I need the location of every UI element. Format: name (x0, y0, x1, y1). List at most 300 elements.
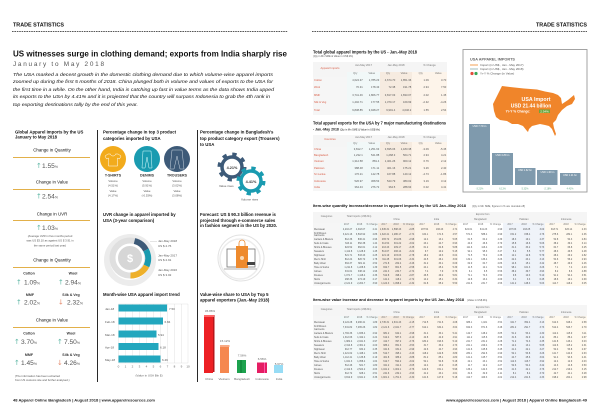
table: item-wise value: 7,331.82 (343, 326, 352, 329)
table: top 7 destinations: Vietnam (314, 160, 324, 163)
bar chart: 6.49 (162, 358, 168, 362)
category labels and values: (3.02%) (172, 184, 182, 188)
table: top 7 destinations: 4.41 (441, 186, 446, 189)
table: item-wise quantity: Bangladesh (474, 218, 487, 221)
table: top 7 destinations: 176.21 (354, 173, 363, 176)
map of USA: Yr-Y % Change: (506, 110, 530, 114)
footer right: www.apparelresources.com | August 2018 | Apparel Online Bangladesh 49 (445, 398, 587, 402)
table: total global apparel imports: 178.43 (371, 86, 379, 89)
change in quantity by fibre: ↓ (58, 298, 64, 306)
change in quantity by fibre: Change in Quantity (33, 258, 72, 262)
category labels and values: Value (174, 189, 181, 193)
change in value by fibre: Cotton (23, 332, 35, 336)
table: total global apparel imports: Silk & Veg (314, 101, 326, 104)
table: top 7 destinations: -1.86 (440, 173, 446, 176)
bar chart: 0 (118, 364, 120, 368)
table: item-wise value: 871.6 (481, 326, 487, 329)
table: top 7 destinations: 881.4 (372, 160, 379, 163)
table: item-wise quantity: 588.4 (481, 233, 487, 236)
gear captions: Value rises (219, 184, 234, 188)
table: total global apparel imports: 1,370.17 (385, 101, 395, 104)
panel: Bangladesh trousers (200, 130, 280, 202)
panel: USA apparel imports map (463, 50, 587, 192)
table: item-wise quantity: 571.3 (466, 233, 472, 236)
table: item-wise value: % Change (490, 316, 501, 319)
change in UVR: (Average UVR in five months period (28, 234, 73, 238)
change in value (13, 180, 90, 200)
bars by partner: 5.32% (522, 188, 529, 190)
table: top 7 destinations: 1,401.26 (385, 160, 395, 163)
change in value by fibre: ↑ (57, 338, 63, 346)
table: top 7 destinations: 142.78 (371, 173, 379, 176)
table: total global apparel imports: 9,991.4 (386, 109, 395, 112)
table: item-wise quantity: 2017 (549, 223, 555, 226)
table: total global apparel imports: Value (401, 72, 407, 75)
title: US witnesses surge in clothing demand; exports from India sharply rise (13, 48, 287, 58)
table: item-wise value: % Change (366, 316, 378, 319)
heading: categories imported by USA (103, 136, 161, 141)
bar chart: 5 (153, 364, 155, 368)
3d bar chart: 5.67% (275, 362, 284, 366)
3d bar chart: 36.86% (205, 309, 215, 313)
table: total global apparel imports: 169.99 (403, 101, 411, 104)
bar chart: 7.50 (169, 307, 175, 311)
table: item-wise quantity: Garments (314, 234, 324, 237)
table: total global apparel imports: -2.32 (423, 101, 429, 104)
table: total global apparel imports: 70.31 (356, 86, 363, 89)
table: total global apparel imports: Jan-May 2018 (387, 64, 405, 67)
table: top 7 destinations: 1,251.63 (369, 148, 379, 151)
change in value by fibre: MMF (25, 353, 34, 357)
table: total global apparel imports: 3.70 (441, 79, 446, 82)
table: top 7 destinations: Bangladesh (314, 154, 328, 157)
heading: in fashion segment in the US by 2020. (200, 223, 277, 228)
panel title and legend (470, 58, 524, 76)
footer left: 48 Apparel Online Bangladesh | August 2018 | www.apparelresources.com (13, 398, 155, 402)
table: top 7 destinations: 526.97 (354, 180, 363, 183)
icon: trousers (164, 146, 190, 172)
change in value by fibre: 3.70% (21, 339, 37, 346)
map of USA: USA Import (522, 97, 551, 103)
change in quantity by fibre: ↑ (16, 298, 22, 306)
table: total global apparel imports: Cotton (314, 79, 322, 82)
bar chart: Apr-18 (105, 346, 114, 350)
heading: top product category export (Trousers) (200, 136, 280, 141)
category labels and values: Volume (172, 179, 182, 183)
donut legend: US $ 2.91 (158, 258, 172, 262)
3d bar chart: 6.56% (258, 357, 267, 361)
table: item-wise value: 3.64 (453, 326, 457, 329)
heading: Forecast: US $ 90.3 billion revenue is (200, 212, 277, 217)
donut legend: Jan-May 2016 (158, 268, 177, 272)
left page header: TRADE STATISTICS (13, 22, 65, 28)
change in quantity (13, 148, 90, 170)
change in quantity by fibre: Wool (69, 272, 77, 276)
table: item-wise value: % Change (445, 316, 457, 319)
table: top 7 destinations: 140.12 (403, 173, 411, 176)
table: item-wise value: 2018 (478, 316, 483, 319)
subtitle date: January to May 2018 (13, 61, 104, 68)
table: total global apparel imports: 3,817.03 (385, 94, 395, 97)
heading: value table: Item-wise value increase and decrease in apparel imports by the US Jan.-May 2018 (313, 297, 465, 302)
table: top 7 destinations: 380.02 (403, 180, 411, 183)
change in value by fibre: Change in Value (36, 318, 69, 322)
table: item-wise quantity: % Change (366, 223, 378, 226)
table: item-wise value: 512.4 (552, 326, 558, 329)
table: item-wise value: 2017 (463, 316, 468, 319)
icon: denims (134, 146, 160, 172)
table: total global apparel imports: 4,046.2 (402, 109, 411, 112)
bars by partner: USD 7.74 bn (473, 125, 487, 128)
table: item-wise quantity: 164.1 (422, 233, 428, 236)
donut legend: Jan-May 2018 (158, 239, 177, 243)
change in value by fibre: ↓ (57, 359, 63, 367)
table: total global apparel imports: Jan-May 2017 (355, 64, 372, 67)
change in value by fibre: ↑ (14, 338, 20, 346)
change in UVR: ↑ (36, 224, 42, 232)
table: total global apparel imports: Apparel Imports (320, 67, 339, 70)
table: total global apparel imports: 3,948.27 (369, 109, 379, 112)
table: top 7 destinations (313, 135, 447, 191)
table: item-wise value: 842.3 (466, 326, 472, 329)
heading: quantity table: (Qty in Mn SME, figures in % are rounded-off) (472, 205, 525, 208)
change in quantity by fibre: Cotton (23, 272, 35, 276)
table: top 7 destinations: 2.12 (441, 160, 446, 163)
change in value by fibre: Wool (67, 332, 75, 336)
bar chart: 10 (186, 364, 190, 368)
table: top 7 destinations: 4.21 (441, 154, 446, 157)
table: item-wise quantity: Pakistan (519, 218, 529, 221)
heading (200, 130, 280, 147)
table: top 7 destinations: 541.88 (371, 154, 379, 157)
panel title and legend: Yr-Y % Change (in Value) (480, 72, 514, 76)
heading: to USA (200, 142, 214, 147)
heading (200, 292, 270, 302)
bar chart: Feb-18 (105, 320, 115, 324)
table: item-wise value: 3.48 (498, 326, 502, 329)
table: item-wise value: Categories (321, 308, 332, 311)
table: item-wise quantity: 2017 (381, 223, 387, 226)
map of USA (493, 86, 575, 136)
table: total global apparel imports: -4.26 (440, 101, 446, 104)
bar chart: 7 (167, 364, 169, 368)
table: item-wise quantity: 2017 (419, 223, 425, 226)
table: total global apparel imports: Value (435, 72, 442, 75)
change in value: ↑ (36, 192, 42, 200)
table: total global apparel imports: % Change (423, 64, 436, 67)
table: top 7 destinations: -3.09 (423, 148, 429, 151)
table: total global apparel imports: Total (314, 109, 320, 112)
bar chart: (Value in USA Bln $) (135, 374, 163, 378)
intro paragraph: The USA marked a decent growth in the domestic clothing demand due to which volume-wise apparel imports (13, 72, 274, 78)
table: item-wise quantity: % Change (575, 223, 586, 226)
table: top 7 destinations: -4.73 (423, 173, 429, 176)
3d bar chart: China (205, 377, 213, 381)
heading: projected through e-commerce sales (200, 218, 276, 223)
table: item-wise quantity: 1,286.17 (392, 233, 401, 236)
table: top 7 destinations: 543.79 (387, 180, 395, 183)
intro paragraph: top exporting destinations tally by the end of this year. (13, 102, 138, 108)
icon: laptop shopping bag (218, 235, 264, 281)
change in quantity by fibre: Silk & Veg (62, 293, 80, 297)
intro paragraph: the first time in a while. On the other hand, India is catching up fast in value terms as the data shows India upped (13, 87, 274, 93)
table: item-wise value: 612.1 (422, 326, 428, 329)
table: total global apparel imports: 3,741.46 (352, 94, 363, 97)
table: item-wise value: Total Imports (US$ Mn) (347, 308, 371, 311)
table: total global apparel imports: 72.38 (388, 86, 395, 89)
table: top 7 destinations: Pakistan (314, 167, 324, 170)
heading: apparel exporters (Jan.-May 2018) (200, 298, 270, 302)
table: total global apparel imports: Qty (419, 72, 423, 75)
panel: top 3 product categories (100, 130, 190, 198)
category labels and values: DENIMS (140, 174, 155, 178)
icon: volume gear: 4.41% (246, 180, 257, 184)
table: top 7 destinations: Qty (386, 142, 390, 145)
table: top 7 destinations: 3.12 (441, 180, 446, 183)
table: item-wise value: 2018 (393, 316, 399, 319)
heading: UVR change in apparel imported by (103, 212, 176, 217)
change in value: Change in Value (36, 180, 69, 184)
change in value by fibre: 7.50% (64, 339, 80, 346)
table: top 7 destinations: 364.5 (388, 186, 395, 189)
table: top 7 destinations: 368.53 (371, 180, 379, 183)
table: item-wise value: -3.77 (409, 326, 414, 329)
bar chart: 6.18 (160, 346, 166, 350)
table: item-wise quantity: Categories (321, 215, 332, 218)
icon: t-shirts (100, 146, 126, 172)
gear captions: Volume rises (241, 198, 259, 202)
table: top 7 destinations: 2.40 (441, 167, 446, 170)
heading: total global apparel imports (313, 50, 418, 58)
intro paragraph: zoomed up during the first 5 months of 2018. China plunged both in volume and values of exports to the USA for (12, 79, 273, 85)
table: item-wise quantity: Total Imports (US$ Mn) (347, 215, 371, 218)
table: total global apparel imports: 1,402.71 (352, 101, 363, 104)
table: total global apparel imports: 177.55 (371, 101, 379, 104)
table: item-wise quantity: 158.4 (524, 233, 530, 236)
3d bar chart: India (276, 377, 283, 381)
table: top 7 destinations: Jan-May 2017 (355, 136, 372, 139)
source note (15, 374, 70, 382)
category labels and values: (4.17%) (108, 194, 118, 198)
change in value by fibre: ↑ (14, 359, 20, 367)
bar chart: 3 (139, 364, 141, 368)
table: total global apparel imports: 1.55 (423, 109, 429, 112)
table: item-wise value: % Change (575, 316, 586, 319)
table: item-wise value: 2017 (549, 316, 555, 319)
table: item-wise quantity: 2.86 (373, 233, 377, 236)
change in quantity by fibre (13, 258, 90, 306)
donut legend: US $ 3.02 (158, 273, 172, 277)
heading: total global apparel imports: Total global apparel imports by the US - Jan.-May 2018 (313, 50, 418, 54)
table: top 7 destinations: 1,232.1 (354, 154, 363, 157)
table: top 7 destinations: 900.12 (403, 160, 411, 163)
right page header: TRADE STATISTICS (536, 22, 588, 28)
bar chart: 6.84 (164, 320, 171, 324)
table: item-wise quantity: 2017 (344, 223, 349, 226)
table: top 7 destinations: India (314, 186, 320, 189)
table: item-wise quantity: India (434, 218, 439, 221)
category labels and values: TROUSERS (167, 174, 188, 178)
table: top 7 destinations: Countries (324, 138, 336, 141)
table: item-wise value: 281.2 (510, 326, 516, 329)
table: top 7 destinations: 564.71 (403, 154, 411, 157)
table: total global apparel imports: Qty (386, 72, 390, 75)
table: item-wise value: 2017 (507, 316, 513, 319)
table: item-wise quantity: 2018 (521, 223, 527, 226)
bars by partner: USD 3.25 bn (496, 154, 510, 157)
change in quantity by fibre: ↑ (16, 278, 22, 286)
bar chart: 4 (146, 364, 148, 368)
change in UVR: Change in UVR (37, 212, 67, 216)
heading: top 7 manufacturing destinations: Total apparel exports for the USA by 7 major manufacturing destinations (313, 120, 447, 126)
table: item-wise value: 2017 (381, 316, 387, 319)
change in quantity: 1.55% (42, 163, 58, 170)
intro paragraph: its exports to the USA by 4.41% and it is projected that the country will surpass Indonesia to grab the 4th rank in (13, 94, 270, 100)
table: top 7 destinations: Value (401, 142, 407, 145)
change in quantity by fibre: 2.32% (67, 300, 83, 306)
table: item-wise value: 7,465.26 (356, 326, 365, 329)
table: top 7 destinations: Value (368, 142, 375, 145)
heading (103, 130, 177, 141)
donut legend: US $ 2.76 (158, 244, 172, 248)
change in value by fibre (13, 318, 90, 367)
table: item-wise quantity: % Change (532, 223, 544, 226)
heading: Global Apparel Imports by the US (15, 130, 83, 134)
bar chart: 8 (174, 364, 176, 368)
table: item-wise value: 2018 (434, 316, 439, 319)
change in value by fibre: 1.45% (21, 360, 37, 367)
table: item-wise value: 526.7 (566, 326, 572, 329)
table: total global apparel imports: Value (368, 72, 375, 75)
source note: from US customs site and further analysed.) (15, 378, 70, 382)
table: item-wise value: India (434, 311, 439, 314)
table: top 7 destinations: China (314, 148, 321, 151)
table: top 7 destinations: 2.94 (423, 154, 429, 157)
table: item-wise value: 634.4 (437, 326, 443, 329)
table: item-wise quantity: 4.57 (453, 233, 457, 236)
3d bar chart: 7.56% (238, 354, 247, 358)
icon: value gear: 4.21% (227, 166, 238, 170)
table: item-wise quantity: Exports from (476, 213, 489, 216)
table: top 7 destinations: Indonesia (314, 180, 326, 183)
table: top 7 destinations: 0.02 (423, 186, 429, 189)
table: item-wise value: 2017 (419, 316, 425, 319)
panel title and legend: Import (in US$ , Jan - May 2018) (480, 67, 524, 71)
category labels and values: (-0.53%) (142, 194, 152, 198)
heading: Percentage change in Bangladesh's (200, 130, 274, 134)
change in value by fibre: 4.26% (64, 360, 80, 367)
table: item-wise quantity: 2018 (393, 223, 399, 226)
bar chart: 5.94 (158, 333, 164, 337)
change in quantity by fibre: 1.09% (24, 280, 40, 286)
table: item-wise quantity: 2018 (434, 223, 439, 226)
table: item-wise value: Indonesia (561, 311, 571, 314)
table: total global apparel imports: 1.09 (423, 79, 429, 82)
source note: (The information has been extracted (15, 374, 60, 378)
bars by partner: 4.41% (567, 188, 574, 190)
table: item-wise quantity: % Change (490, 223, 501, 226)
table: top 7 destinations: 401.16 (387, 167, 395, 170)
heading: USA (3-year comparison) (103, 218, 155, 223)
table: item-wise value (313, 305, 587, 380)
table: item-wise quantity: % Change (445, 223, 457, 226)
table: item-wise value: 1.82 (373, 326, 377, 329)
bars by partner: USD 1.21 bn (563, 174, 578, 177)
table: top 7 destinations: 276.72 (371, 186, 379, 189)
category labels and values (105, 174, 188, 198)
heading: January to May 2018 (15, 134, 58, 140)
table: total global apparel imports: 1.45 (441, 94, 446, 97)
table: top 7 destinations: Jan-May 2018 (387, 136, 405, 139)
change in quantity by fibre: MMF (26, 293, 35, 297)
change in UVR (13, 212, 90, 248)
table: item-wise value: Exports from (476, 306, 489, 309)
table: top 7 destinations: 175.21 (403, 167, 411, 170)
table: item-wise quantity: % Change (403, 223, 414, 226)
donut legend: Jan-May 2017 (158, 254, 177, 258)
table: item-wise quantity: 2.99 (498, 233, 502, 236)
table: item-wise value: 3.73 (540, 326, 544, 329)
map of USA: 2.54% (540, 110, 549, 114)
heading: value table: (Value in US$ Mn) (467, 299, 487, 302)
change in quantity by fibre: 2.02% (24, 300, 40, 306)
table: item-wise value: 291.7 (524, 326, 530, 329)
bar chart: Mar-18 (105, 333, 115, 337)
table: item-wise value: 2018 (563, 316, 569, 319)
table: item-wise quantity: 2.36 (582, 233, 586, 236)
table: top 7 destinations: 1,312.58 (352, 160, 363, 163)
table: top 7 destinations: Qty (419, 142, 423, 145)
gear captions (219, 184, 259, 202)
table: item-wise quantity: 3,421.16 (343, 233, 352, 236)
category labels and values: (3.08%) (172, 194, 182, 198)
table: top 7 destinations: 171.11 (371, 167, 379, 170)
table: item-wise value: % Change (532, 316, 544, 319)
table: total global apparel imports: 1,785.23 (369, 79, 379, 82)
table: item-wise quantity: China (393, 218, 400, 221)
panel: global apparel imports (13, 130, 90, 382)
table: top 7 destinations: 3,812.7 (354, 148, 363, 151)
table: total global apparel imports: 191.78 (403, 86, 411, 89)
table: top 7 destinations: 364.43 (354, 186, 363, 189)
bar chart: Jan-18 (105, 307, 115, 311)
table: item-wise value: China (393, 311, 400, 314)
table: item-wise quantity (313, 212, 587, 286)
3d bar chart (204, 309, 284, 381)
table: top 7 destinations: 3.19 (423, 180, 429, 183)
table: total global apparel imports: 9,838.85 (352, 109, 363, 112)
heading (103, 212, 176, 223)
table: top 7 destinations: 167.88 (387, 173, 395, 176)
bar chart: 1 (125, 364, 127, 368)
table: item-wise quantity: 4.76 (540, 233, 544, 236)
panel: value-wise share by exporter (200, 292, 284, 381)
bars by partner: 6.11% (499, 188, 507, 190)
table: top 7 destinations: 6.76 (423, 160, 429, 163)
bar chart: 9 (181, 364, 183, 368)
table: item-wise value: 2018 (357, 316, 362, 319)
bars by partner: USD 1.40 bn (541, 171, 555, 174)
panel: month-wise import trend (103, 292, 190, 378)
table: item-wise value: 2,121.6 (381, 326, 389, 329)
bar chart: May-18 (105, 358, 115, 362)
table: item-wise value: % Change (403, 316, 414, 319)
table: item-wise quantity: 275.6 (552, 233, 558, 236)
heading: top 7 manufacturing destinations: - Jan.-May 2018 (Qty in Mn SME & Value in US$ Mn) (313, 128, 380, 132)
table: item-wise quantity: 2017 (463, 223, 468, 226)
donut chart: $ (127, 253, 133, 265)
bar chart: 2 (132, 364, 134, 368)
